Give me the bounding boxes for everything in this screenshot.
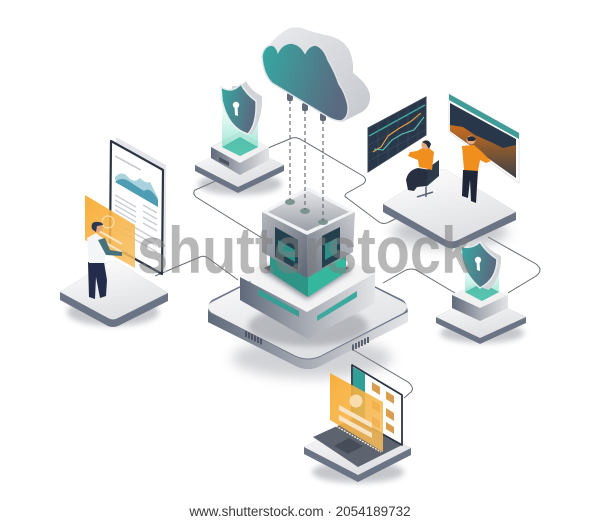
icon: shield <box>461 240 501 290</box>
teal glowing core <box>270 232 346 297</box>
laptop screen <box>352 365 402 445</box>
status bar: right <box>317 291 357 321</box>
cube panel: right <box>322 227 340 268</box>
cloud <box>262 27 370 122</box>
status bar: left <box>258 289 299 317</box>
seated analyst <box>406 140 439 197</box>
tablet with document <box>110 137 166 274</box>
orange login card <box>85 195 135 268</box>
main server platform <box>208 256 408 378</box>
chart screen: area graph <box>449 94 519 183</box>
panel: analytics node <box>368 94 519 248</box>
cube top dots <box>285 199 328 225</box>
vent: left <box>246 331 261 344</box>
footer text: www.shutterstock.com · 2054189732 <box>188 504 411 519</box>
icon: shield <box>221 81 262 134</box>
panel: left shield node <box>195 81 284 195</box>
area chart <box>115 174 158 207</box>
connector lines <box>155 138 540 398</box>
dashed data links <box>290 100 323 221</box>
panel: right shield node <box>436 240 526 344</box>
cloud connectors <box>287 93 326 121</box>
chart screen: line graph <box>368 97 426 172</box>
vent: right <box>353 337 368 350</box>
laptop keyboard <box>313 417 402 467</box>
panel: left user node <box>60 137 168 327</box>
person <box>87 222 122 299</box>
text lines <box>115 195 157 252</box>
panel: laptop node <box>304 365 411 483</box>
orange login card <box>330 373 383 452</box>
vent: left box <box>219 157 229 166</box>
cube panel: left <box>275 227 298 270</box>
standing analyst <box>462 136 491 203</box>
middle server box <box>240 242 375 339</box>
server cube <box>262 187 355 278</box>
watermark: shutterstock <box>137 213 472 287</box>
